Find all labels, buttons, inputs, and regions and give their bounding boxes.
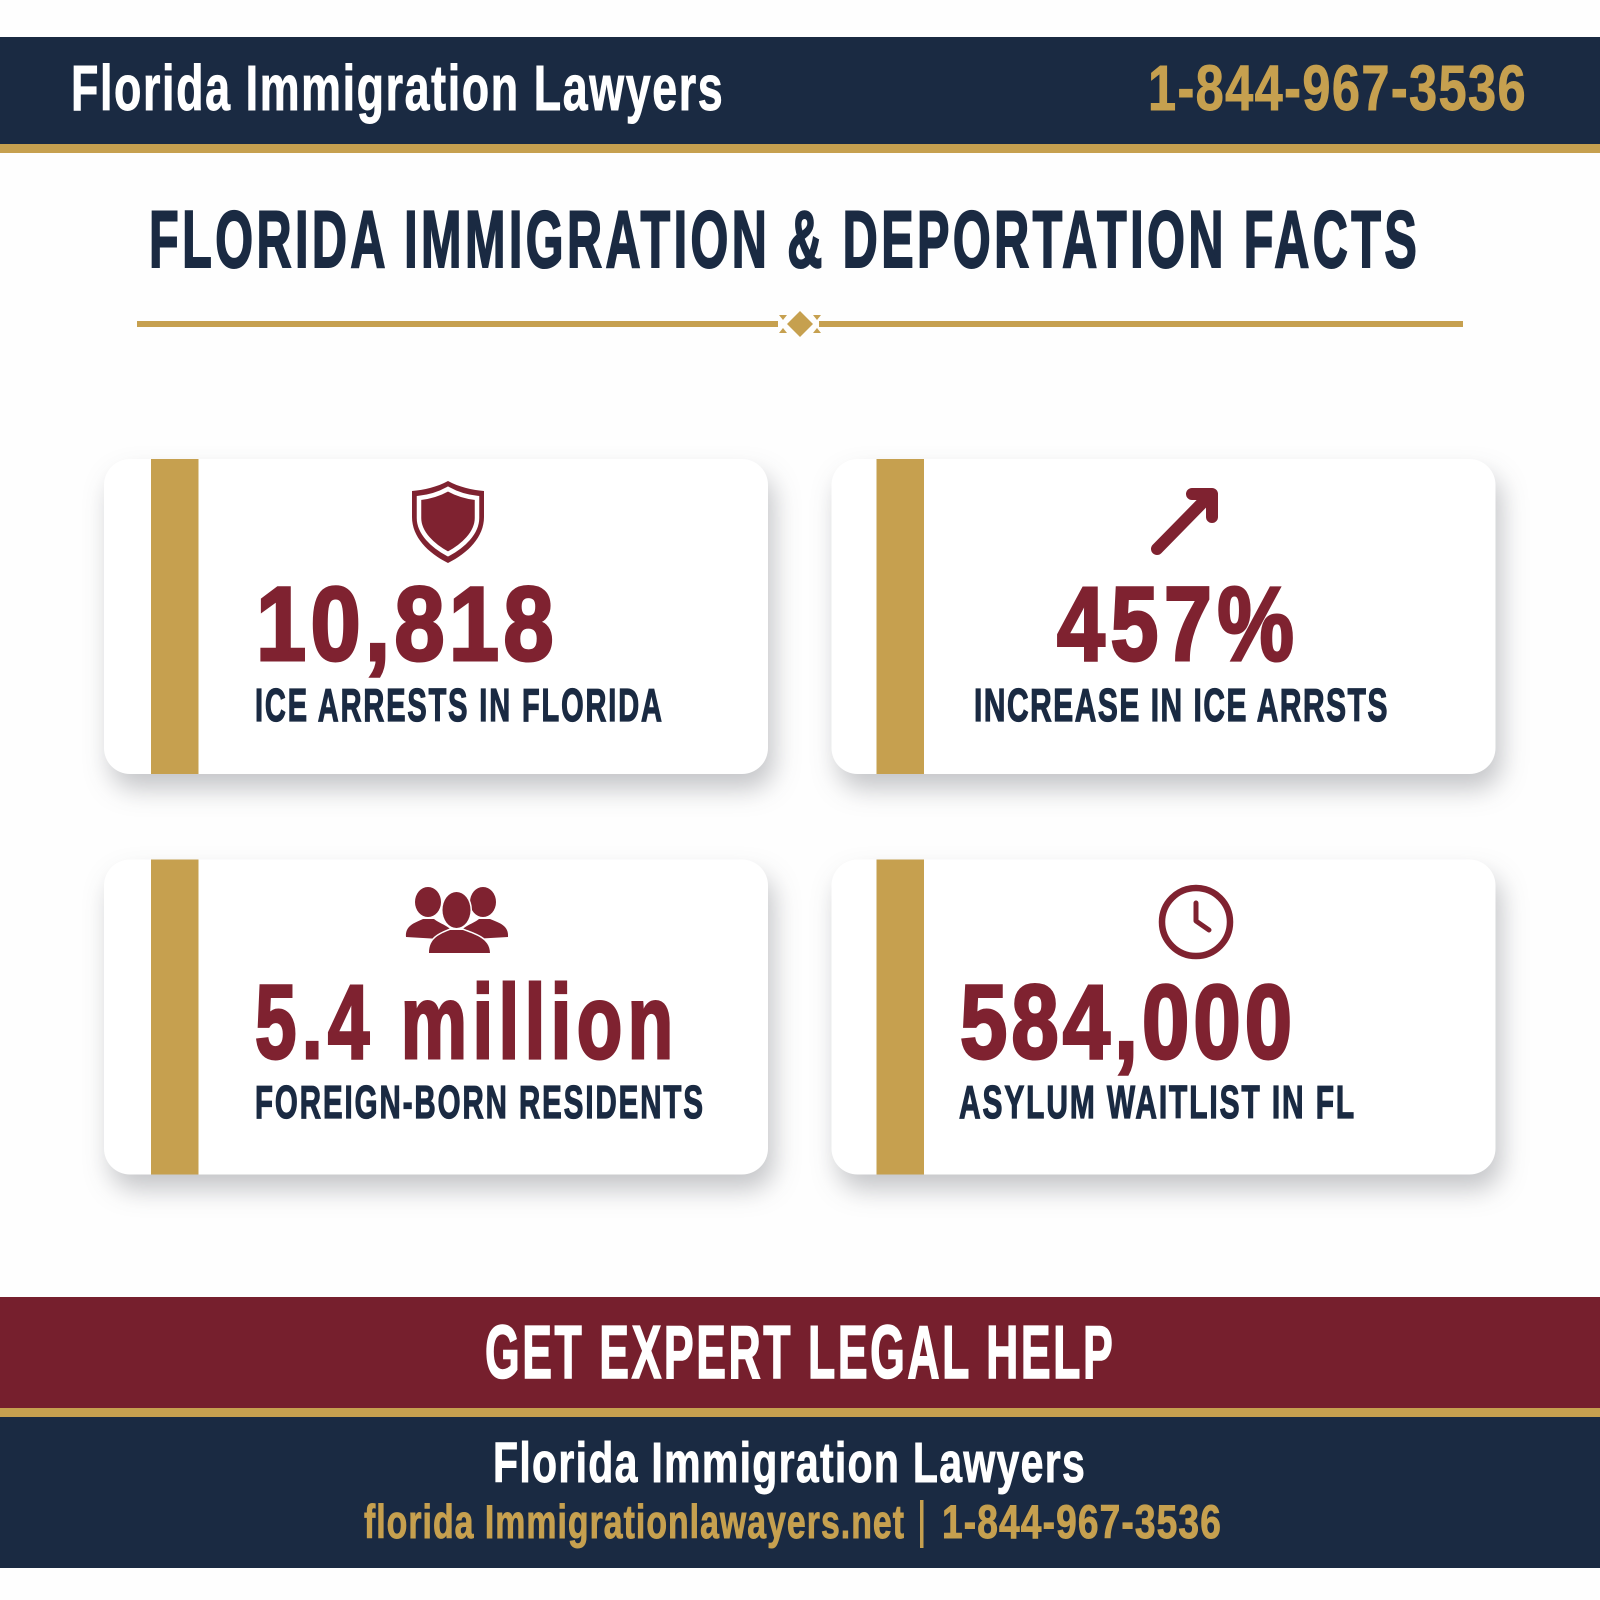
stat: 457%: 457% xyxy=(1057,566,1294,683)
stat: 10,818: 10,818 xyxy=(256,565,554,683)
label: increase in ICE arrests: INCREASE IN ICE ARRSTS xyxy=(974,681,1387,732)
footer band xyxy=(0,1408,1600,1568)
header firm name: Florida Immigration Lawyers xyxy=(71,52,723,124)
header phone number: 1-844-967-3536 xyxy=(1148,53,1526,124)
label: foreign-born residents: FOREIGN-BORN RESIDENTS xyxy=(255,1078,703,1129)
call to action band xyxy=(0,1297,1600,1408)
footer firm name: Florida Immigration Lawyers xyxy=(493,1430,1085,1495)
stat: 5.4 million: 5.4 million xyxy=(255,965,673,1081)
header band xyxy=(0,37,1600,153)
panel: asylum waitlist xyxy=(832,860,1496,1174)
stat: 584,000: 584,000 xyxy=(960,965,1292,1081)
label: asylum waitlist: ASYLUM WAITLIST IN FL xyxy=(959,1078,1354,1129)
panel: foreign-born residents xyxy=(104,860,768,1174)
title: FLORIDA IMMIGRATION & DEPORTATION FACTS xyxy=(149,195,1417,285)
icon: clock xyxy=(1162,888,1230,956)
panel: increase in arrests xyxy=(832,459,1496,774)
panel: ICE arrests xyxy=(104,459,768,774)
call to action text: GET EXPERT LEGAL HELP xyxy=(485,1311,1113,1395)
icon: up arrow xyxy=(1157,494,1212,549)
icon: shield xyxy=(412,481,484,563)
icon: people xyxy=(406,887,508,953)
label: ICE arrests in Florida: ICE ARRESTS IN FLORIDA xyxy=(255,680,662,732)
footer separator xyxy=(920,1500,924,1548)
ornamental divider xyxy=(137,311,1463,337)
footer phone number: 1-844-967-3536 xyxy=(942,1496,1221,1548)
footer website: florida Immigrationlawayers.net xyxy=(364,1496,904,1548)
